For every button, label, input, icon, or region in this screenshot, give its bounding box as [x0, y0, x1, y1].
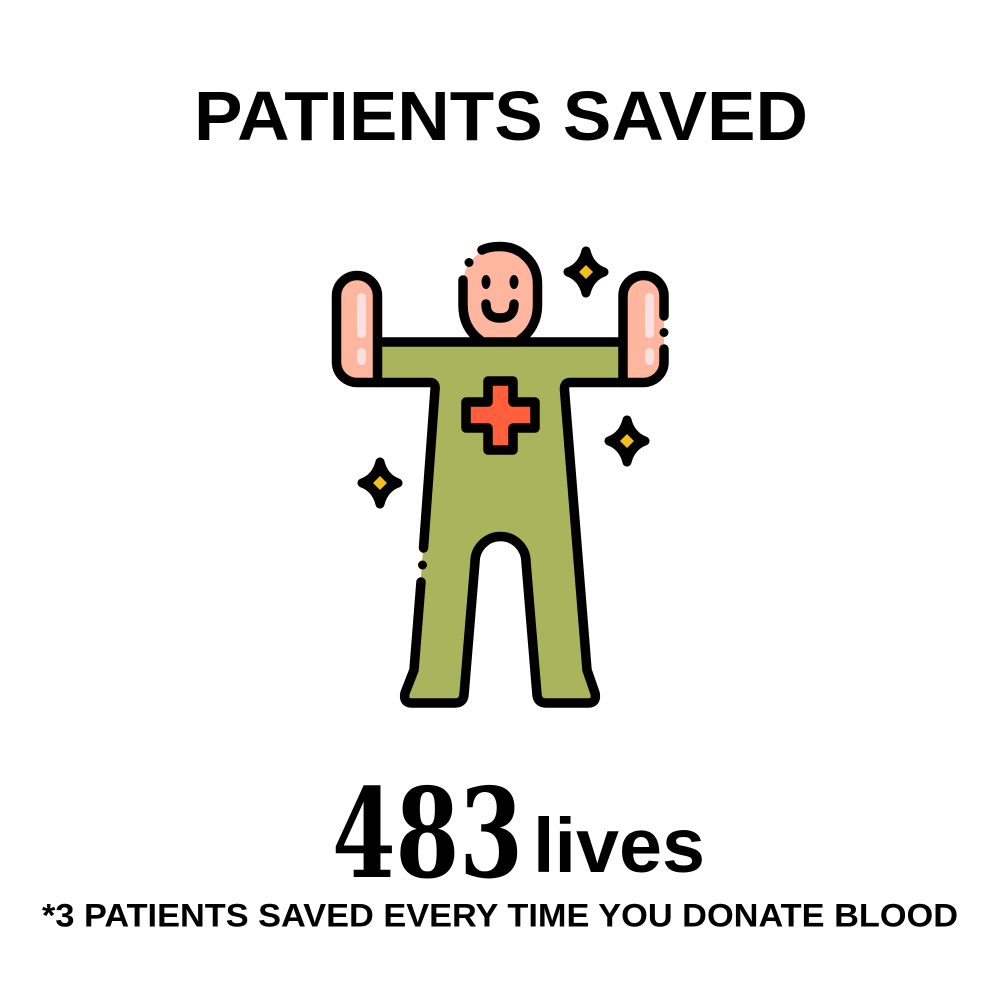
sparkle: left — [362, 462, 398, 504]
icon: medical cross — [466, 381, 535, 450]
lives unit label: lives — [533, 803, 705, 889]
lives count number: 483 — [332, 762, 523, 907]
right hand — [623, 276, 668, 382]
footnote: *3 PATIENTS SAVED EVERY TIME YOU DONATE BLOOD — [42, 898, 958, 934]
left hand — [336, 276, 378, 382]
body suit — [378, 342, 623, 703]
sparkle: middle right — [609, 420, 645, 462]
sparkle: top right — [568, 251, 604, 293]
title: PATIENTS SAVED — [194, 77, 808, 155]
head — [463, 246, 538, 341]
illustration: happy patient — [336, 246, 668, 703]
